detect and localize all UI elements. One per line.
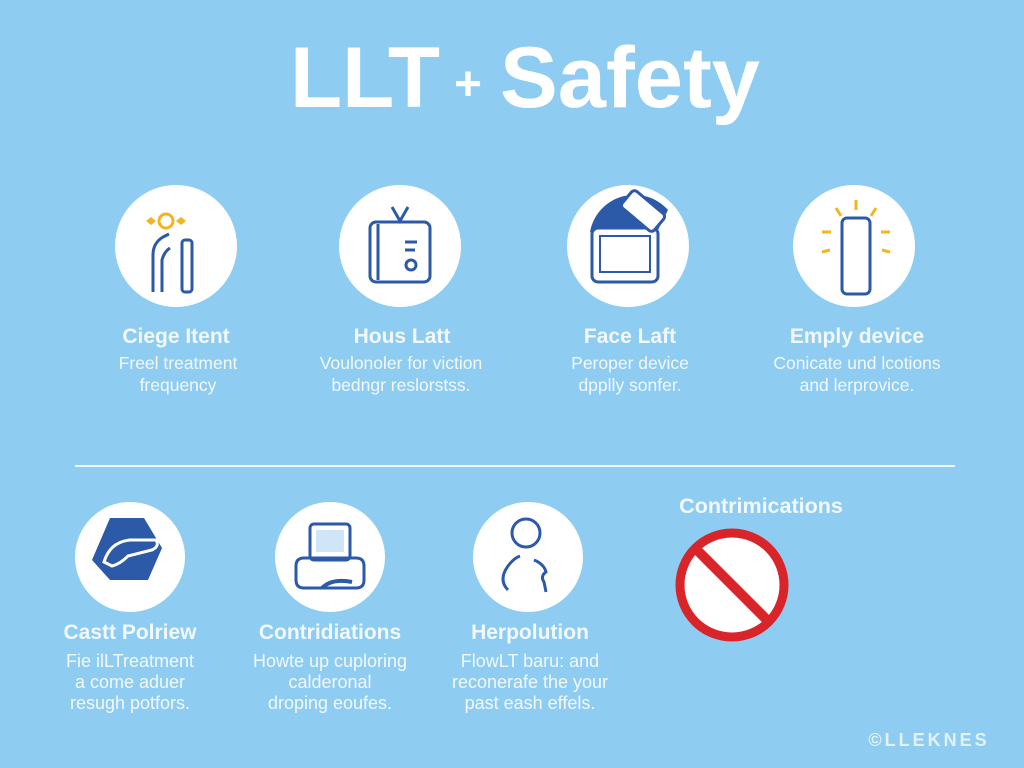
heading: Emply device <box>790 325 924 348</box>
text block: Fie ilLTreatment <box>66 651 194 671</box>
text block: reconerafe the your <box>452 672 608 692</box>
panel: Contrimications <box>679 494 843 637</box>
text block: resugh potfors. <box>70 693 190 713</box>
text block: Freel treatment <box>119 353 237 373</box>
text block: Voulonoler for viction <box>320 353 482 373</box>
text block: FlowLT baru: and <box>461 651 599 671</box>
text block: bedngr reslorstss. <box>331 375 471 395</box>
panel: Face Laft <box>567 185 689 395</box>
title: Safety <box>500 30 760 126</box>
icon: tablet <box>567 185 689 307</box>
text block: a come aduer <box>75 672 185 692</box>
panel: Ciege Itent <box>115 185 237 395</box>
panel: Contridiations <box>253 502 407 713</box>
heading: Hous Latt <box>354 325 450 348</box>
text block: Howte up cuploring <box>253 651 407 671</box>
panel: Emply device <box>773 185 941 395</box>
heading: Ciege Itent <box>122 325 230 348</box>
heading: Face Laft <box>584 325 676 348</box>
icon: device <box>339 185 461 307</box>
panel: Herpolution <box>452 502 608 713</box>
icon: prohibition sign <box>680 533 784 637</box>
icon: phone glow <box>793 185 915 307</box>
icon: hand <box>75 502 185 612</box>
icon: hands and sun <box>115 185 237 307</box>
text block: Conicate und lcotions <box>773 353 941 373</box>
icon: person <box>473 502 583 612</box>
text block: and lerprovice. <box>800 375 914 395</box>
text block: frequency <box>140 375 217 395</box>
icon: seat <box>275 502 385 612</box>
logo: ©LLEKNES <box>868 730 990 750</box>
panel: Castt Polriew <box>63 502 197 713</box>
text block: dpplly sonfer. <box>578 375 682 395</box>
panel: Hous Latt <box>320 185 482 395</box>
title: + <box>454 58 482 111</box>
title <box>290 30 760 126</box>
title: LLT <box>290 30 440 126</box>
heading: Herpolution <box>471 621 589 644</box>
heading: Contridiations <box>259 621 401 644</box>
text block: past eash effels. <box>465 693 595 713</box>
heading: Contrimications <box>679 494 843 518</box>
heading: Castt Polriew <box>63 621 197 644</box>
text block: droping eoufes. <box>268 693 392 713</box>
text block: Peroper device <box>571 353 689 373</box>
text block: calderonal <box>288 672 372 692</box>
